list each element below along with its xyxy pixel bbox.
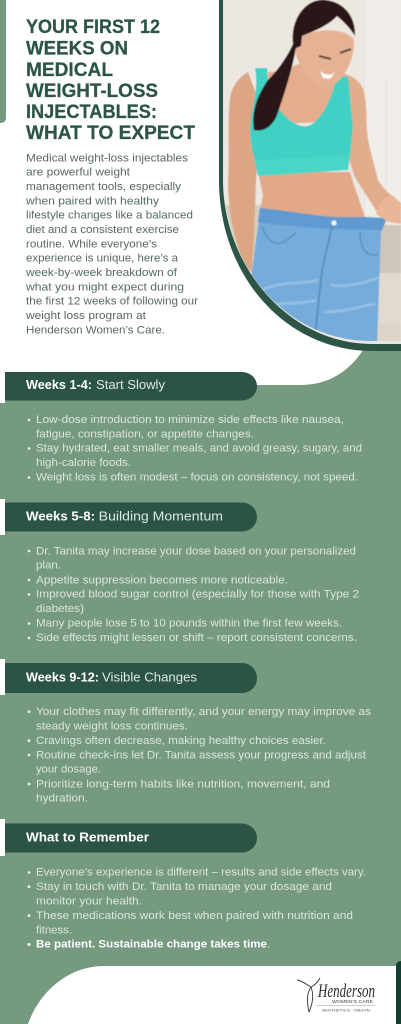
bullet list: Weeks 1-4: Low-dose introduction to minimize side effects like nausea,	[36, 414, 344, 426]
bullet list: Weeks 9-12: Cravings often decrease, making healthy choices easier.	[36, 735, 326, 747]
bullet list: Weeks 1-4	[28, 414, 362, 484]
bullet list: Weeks 5-8: Dr. Tanita may increase your dose based on your personalized	[36, 545, 356, 557]
header bar: Weeks 5-8: Building Momentum	[99, 509, 223, 524]
bullet list: Weeks 5-8: diabetes)	[36, 603, 84, 615]
accent strip: bottom right	[396, 961, 401, 1024]
title: MEDICAL	[26, 60, 113, 81]
footer white panel	[28, 966, 401, 1024]
bullet list: Weeks 5-8: Many people lose 5 to 10 pounds within the first few weeks.	[36, 618, 342, 630]
intro paragraph: Medical weight-loss injectables	[26, 152, 188, 164]
header bar: Weeks 1-4	[0, 372, 257, 403]
header bar: What to Remember: What to Remember	[26, 830, 149, 844]
title	[26, 17, 195, 144]
bullet list: Weeks 5-8: plan.	[36, 560, 61, 572]
title: INJECTABLES:	[26, 102, 157, 123]
logo: Henderson Women's Care	[297, 978, 375, 1012]
title: YOUR FIRST 12	[26, 17, 160, 38]
intro paragraph: what you might expect during	[25, 281, 184, 293]
intro paragraph: week-by-week breakdown of	[25, 267, 178, 279]
bullet list: What to Remember: Everyone’s experience is different – results and side effects vary.	[36, 867, 366, 879]
bullet list: What to Remember: .	[267, 939, 270, 951]
section: Weeks 9-12	[0, 659, 371, 805]
section: Weeks 5-8	[0, 499, 359, 644]
bullet list: Weeks 9-12: Routine check-ins let Dr. Tanita assess your progress and adjust	[36, 749, 367, 761]
intro paragraph: lifestyle changes like a balanced	[26, 210, 193, 222]
bullet list: What to Remember: fitness.	[36, 924, 72, 936]
bullet list: What to Remember: Stay in touch with Dr. Tanita to manage your dosage and	[36, 881, 332, 893]
header bar: Weeks 5-8	[0, 499, 257, 535]
bullet list: Weeks 5-8: Appetite suppression becomes more noticeable.	[36, 574, 288, 586]
icon: dancer figure	[297, 978, 320, 1012]
bullet list: Weeks 9-12: hydration.	[36, 793, 88, 805]
bullet list: What to Remember: Be patient. Sustainable change takes time	[36, 939, 267, 951]
intro paragraph	[25, 152, 198, 336]
logo: Henderson Women's Care: WOMEN'S CARE	[332, 999, 373, 1005]
header bar: Weeks 1-4: Weeks 1-4:	[26, 377, 92, 392]
bullet list: Weeks 9-12: steady weight loss continues.	[36, 720, 188, 732]
bullet list: Weeks 5-8: Side effects might lessen or shift – report consistent concerns.	[36, 632, 357, 644]
title: WEEKS ON	[26, 38, 128, 60]
intro paragraph: are powerful weight	[26, 167, 131, 179]
bullet list: What to Remember	[28, 867, 366, 951]
bullet list: Weeks 9-12	[28, 706, 371, 805]
bullet list: Weeks 9-12: Prioritize long-term habits like nutrition, movement, and	[36, 778, 330, 790]
bullet list: Weeks 9-12: Your clothes may fit differently, and your energy may improve as	[36, 706, 371, 718]
bullet list: Weeks 1-4: high-calorie foods.	[36, 457, 131, 469]
intro paragraph: experience is unique, here’s a	[26, 253, 179, 265]
bullet list: Weeks 1-4: Weight loss is often modest – focus on consistency, not speed.	[36, 472, 358, 484]
title: WEIGHT-LOSS	[26, 81, 158, 102]
intro paragraph: weight loss program at	[25, 310, 147, 322]
intro paragraph: Henderson Women’s Care.	[26, 324, 165, 336]
intro paragraph: routine. While everyone’s	[26, 238, 157, 250]
bullet list: What to Remember: monitor your health.	[36, 895, 142, 907]
bullet list: Weeks 1-4: fatigue, constipation, or appetite changes.	[36, 429, 254, 441]
section: Weeks 1-4	[0, 372, 362, 484]
bullet list: Weeks 1-4: Stay hydrated, eat smaller meals, and avoid greasy, sugary, and	[36, 443, 362, 455]
intro paragraph: the first 12 weeks of following our	[26, 296, 198, 308]
title: WHAT TO EXPECT	[26, 123, 195, 144]
bullet list: Weeks 5-8	[28, 545, 359, 644]
logo: Henderson Women's Care: Henderson	[317, 981, 375, 1002]
header bar: Weeks 9-12: Weeks 9-12:	[26, 670, 99, 684]
logo: Henderson Women's Care: AESTHETICS · OBGYN	[322, 1008, 370, 1012]
header bar: Weeks 9-12: Visible Changes	[102, 670, 197, 684]
section: What to Remember	[0, 819, 366, 951]
bullet list: What to Remember: These medications work best when paired with nutrition and	[36, 910, 353, 922]
bullet list: Weeks 5-8: Improved blood sugar control (especially for those with Type 2	[36, 589, 359, 601]
header bar: Weeks 9-12	[0, 659, 257, 695]
header bar: Weeks 5-8: Weeks 5-8:	[26, 509, 95, 524]
intro paragraph: management tools, especially	[26, 181, 181, 193]
intro paragraph: diet and a consistent exercise	[26, 224, 179, 236]
photo: woman holding oversized jeans	[219, 0, 401, 351]
bullet list: Weeks 9-12: your dosage.	[36, 764, 101, 776]
intro paragraph: when paired with healthy	[25, 195, 159, 207]
header bar: What to Remember	[0, 819, 257, 856]
green background panel	[0, 350, 401, 1024]
accent strip: top left	[0, 0, 6, 123]
header bar: Weeks 1-4: Start Slowly	[96, 377, 165, 392]
